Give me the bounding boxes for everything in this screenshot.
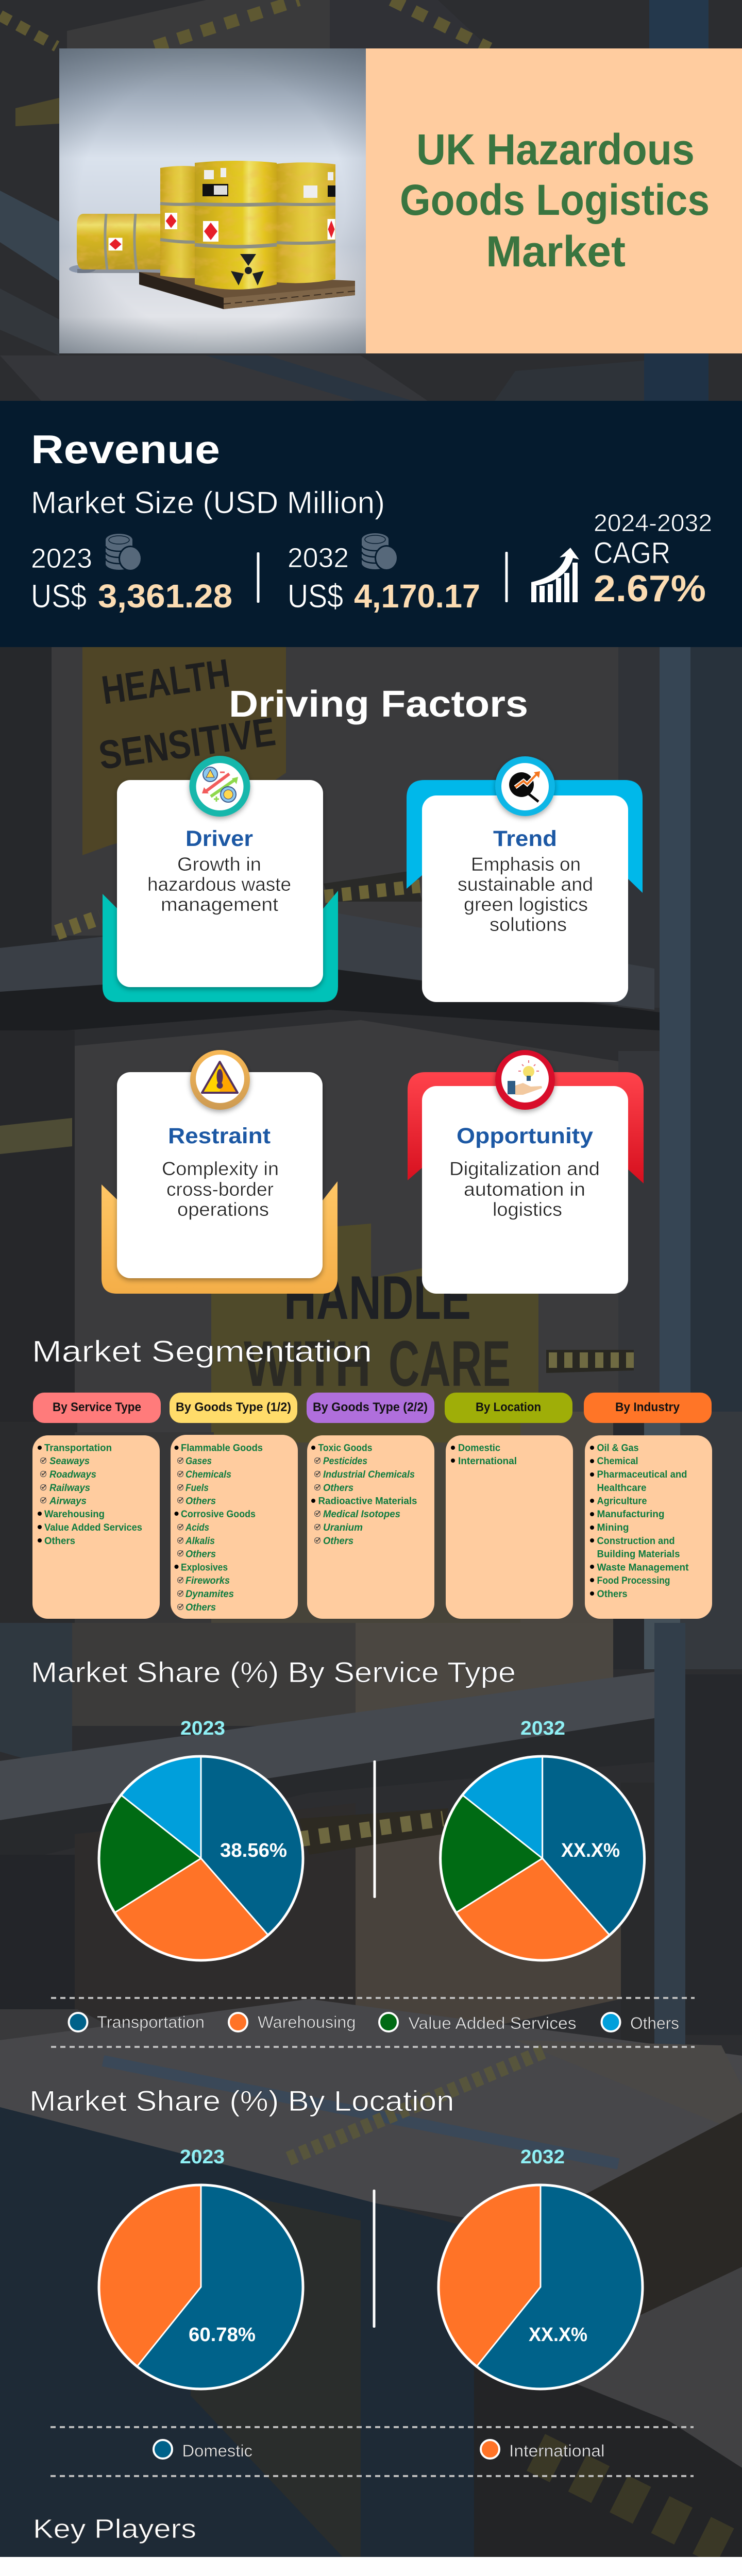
segment list: Industrial Chemicals <box>323 1469 415 1480</box>
text: opportunity description: automation in <box>464 1179 585 1200</box>
stat: 2032 revenue: 2032 <box>288 543 349 573</box>
heading: driver: Driver <box>185 826 253 851</box>
segment list: Construction and <box>597 1535 675 1547</box>
icon: hazard diamond on lying barrel <box>108 238 123 250</box>
segment list: Food Processing <box>597 1575 670 1586</box>
segment list: Warehousing <box>44 1509 105 1520</box>
chart: service type pie 2023: 38.56% <box>220 1840 287 1861</box>
segment list: Transportation <box>44 1443 112 1454</box>
segment list: Radioactive Materials <box>318 1495 417 1506</box>
stat: 2023 revenue <box>31 534 232 615</box>
chart: location pie 2032 <box>439 2146 643 2389</box>
text: trend description: solutions <box>490 914 567 935</box>
icon: hazard diamond on front barrel <box>203 221 218 242</box>
background sign text: CARE <box>389 1328 511 1400</box>
background sign text: WITH <box>244 1328 371 1400</box>
segment list: Roadways <box>49 1469 96 1480</box>
segment list: Others <box>44 1535 75 1547</box>
segment list: Value Added Services <box>44 1522 142 1533</box>
segment list: Agriculture <box>597 1495 647 1506</box>
segment header: By Goods Type (1/2) <box>176 1400 291 1414</box>
text: restraint description: Complexity in <box>162 1158 279 1179</box>
segment list: Medical Isotopes <box>323 1509 400 1520</box>
column: by goods type 1 of 2 <box>170 1393 298 1619</box>
segment header: By Service Type <box>53 1400 141 1414</box>
segment header <box>584 1393 712 1423</box>
segment list: Mining <box>597 1522 629 1533</box>
panel: trend <box>407 756 643 1002</box>
text: restraint description <box>162 1158 279 1220</box>
segment list <box>171 1435 298 1619</box>
title: Goods Logistics <box>400 176 710 224</box>
stat: 2023 revenue: 3,361.28 <box>98 578 232 615</box>
segment list: Uranium <box>323 1522 363 1533</box>
segment list: Alkalis <box>185 1535 215 1547</box>
title <box>400 125 710 276</box>
stat: 2032 revenue <box>288 533 480 615</box>
chart: location pie 2023: 60.78% <box>189 2324 256 2346</box>
segment header <box>170 1393 297 1423</box>
text: restraint description: operations <box>177 1199 269 1220</box>
segment list <box>32 1435 160 1619</box>
segment list: Acids <box>185 1522 209 1533</box>
chart: location pie 2032: 2032 <box>520 2146 565 2168</box>
chart: location pie 2032: XX.X% <box>529 2324 587 2346</box>
hero image: hazardous barrels on pallet <box>59 48 366 353</box>
text: driver description: hazardous waste <box>147 874 291 895</box>
segment list: Others <box>323 1482 353 1494</box>
chart: service type pie 2023 <box>99 1718 303 1960</box>
segment list: Others <box>185 1602 216 1613</box>
chart: location pie 2023: 2023 <box>180 2146 225 2168</box>
icon: trend badge <box>495 756 555 816</box>
chart: service type pie 2023: 2023 <box>180 1718 225 1739</box>
chart: service type pie 2032: XX.X% <box>561 1840 620 1861</box>
icon: hazard diamond on right barrel <box>328 219 335 240</box>
background sign text: HANDLE <box>284 1263 471 1332</box>
segment list: International <box>458 1455 517 1467</box>
stat: 2023 revenue: US$ <box>31 578 87 615</box>
stat: 2023 revenue: 2023 <box>31 543 92 574</box>
segment header <box>445 1393 572 1423</box>
panel: driver <box>103 756 338 1002</box>
segment header <box>307 1393 434 1423</box>
segment header: By Location <box>476 1400 541 1414</box>
segment list: Seaways <box>49 1455 90 1467</box>
heading: market segmentation: Market Segmentation <box>32 1335 372 1368</box>
heading: key players: Key Players <box>33 2514 196 2544</box>
segment list: Others <box>185 1495 216 1506</box>
segment list <box>446 1435 573 1619</box>
text: driver description <box>147 854 291 915</box>
heading: market share by service type: Market Share (%) By Service Type <box>31 1656 516 1688</box>
heading: driving factors: Driving Factors <box>229 684 528 725</box>
icon: opportunity badge <box>495 1050 555 1110</box>
column: by industry <box>584 1393 712 1619</box>
icon: restraint badge <box>190 1050 250 1110</box>
segment list: Waste Management <box>597 1562 689 1573</box>
segment header <box>33 1393 161 1423</box>
panel: revenue band <box>0 401 742 647</box>
legend: service type: Value Added Services <box>408 2014 576 2032</box>
title: UK Hazardous <box>416 125 695 174</box>
icon: coins <box>106 534 142 571</box>
text: driver description: management <box>161 894 279 915</box>
hero panel <box>59 48 742 353</box>
segment list: Explosives <box>181 1562 228 1573</box>
heading: trend: Trend <box>493 826 557 851</box>
stat: CAGR: 2024-2032 <box>594 509 712 536</box>
panel: key player logos <box>0 2557 742 2576</box>
segment list: Railways <box>49 1482 90 1494</box>
segment list: Others <box>185 1549 216 1560</box>
segment list: Pesticides <box>323 1455 367 1467</box>
text: trend description <box>458 854 593 935</box>
segment list: Fuels <box>185 1482 209 1494</box>
segment list: Others <box>323 1535 353 1547</box>
background sign text: HEALTH <box>99 650 233 713</box>
column: by service type <box>32 1393 161 1619</box>
text: trend description: green logistics <box>464 894 588 915</box>
segment list: Corrosive Goods <box>181 1509 256 1520</box>
icon: hazard diamond on back-left barrel <box>165 213 177 229</box>
segment list: Chemical <box>597 1455 638 1467</box>
heading: restraint: Restraint <box>168 1124 271 1148</box>
heading: opportunity: Opportunity <box>457 1124 593 1148</box>
segment header: By Industry <box>615 1400 680 1414</box>
legend: location: International <box>509 2442 605 2460</box>
segment list: Gases <box>185 1455 212 1467</box>
stat: CAGR: CAGR <box>594 536 670 570</box>
icon: coins <box>362 533 398 571</box>
panel: opportunity <box>408 1050 644 1294</box>
subheading: market size: Market Size (USD Million) <box>31 485 385 520</box>
panel: restraint <box>102 1050 338 1294</box>
text: opportunity description: Digitalization and <box>449 1158 600 1179</box>
stat: CAGR: 2.67% <box>594 568 706 609</box>
legend: service type <box>69 2013 679 2032</box>
segment list: Oil & Gas <box>597 1443 639 1454</box>
segment list: Building Materials <box>597 1549 680 1560</box>
segment list: Others <box>597 1588 628 1600</box>
stat: CAGR <box>594 509 712 609</box>
segment list: Dynamites <box>185 1588 234 1600</box>
column: by goods type 2 of 2 <box>307 1393 434 1619</box>
segment list: Fireworks <box>185 1575 230 1586</box>
icon: driver badge <box>190 756 250 817</box>
text: opportunity description <box>449 1158 600 1220</box>
segment list: Chemicals <box>185 1469 231 1480</box>
stat: 2032 revenue: US$ <box>288 578 343 615</box>
legend: service type: Transportation <box>97 2013 205 2031</box>
text: driver description: Growth in <box>177 854 261 875</box>
title: Market <box>486 227 626 276</box>
text: opportunity description: logistics <box>493 1199 562 1220</box>
title panel <box>366 48 742 353</box>
legend: location <box>154 2440 605 2460</box>
legend: service type: Others <box>630 2014 679 2032</box>
text: trend description: sustainable and <box>458 874 593 895</box>
chart: service type pie 2032 <box>441 1718 645 1960</box>
segment list: Flammable Goods <box>181 1443 263 1454</box>
heading: revenue: Revenue <box>31 427 220 472</box>
segment list: Airways <box>49 1495 87 1506</box>
chart: location pie 2023 <box>99 2146 303 2389</box>
segment list: Healthcare <box>597 1482 647 1494</box>
heading: market share by location: Market Share (%) By Location <box>29 2084 454 2117</box>
chart: service type pie 2032: 2032 <box>520 1718 565 1739</box>
legend: location: Domestic <box>182 2442 252 2460</box>
segment list <box>307 1435 434 1619</box>
background sign text: SENSITIVE <box>96 708 278 778</box>
segment list: Domestic <box>458 1443 500 1454</box>
segment header: By Goods Type (2/2) <box>313 1400 428 1414</box>
segment list <box>585 1435 712 1619</box>
icon: radiation symbol <box>231 254 264 285</box>
column: by location <box>445 1393 573 1619</box>
segment list: Manufacturing <box>597 1509 665 1520</box>
segment list: Toxic Goods <box>318 1443 373 1454</box>
text: trend description: Emphasis on <box>471 854 581 875</box>
segment list: Pharmaceutical and <box>597 1469 687 1480</box>
icon: rising chart arrow <box>531 548 579 602</box>
text: restraint description: cross-border <box>166 1179 274 1200</box>
legend: service type: Warehousing <box>258 2013 356 2031</box>
stat: 2032 revenue: 4,170.17 <box>354 578 480 615</box>
